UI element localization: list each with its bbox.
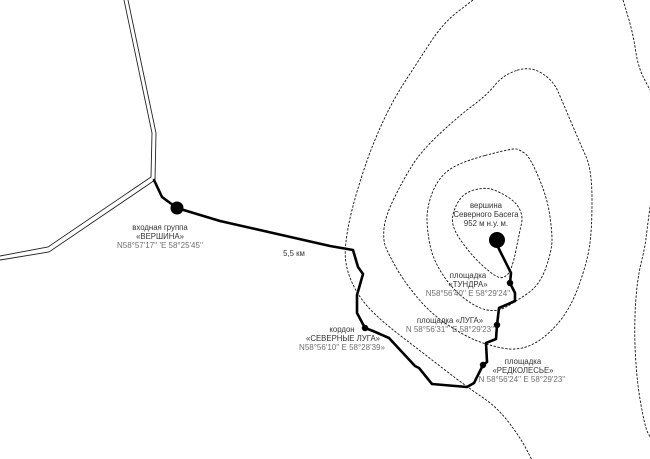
label: entrance: N58°57'17'' 'E 58°25'45'' (117, 241, 203, 250)
label: Redkolesye site (479, 357, 566, 384)
marker: summit (489, 232, 505, 248)
road: double line (0, 0, 156, 260)
label: entrance: входная группа (132, 223, 188, 232)
label: summit: Северного Басега (453, 210, 519, 219)
label: Redkolesye site: площадка (505, 357, 542, 366)
label: Luga site: площадка «ЛУГА» (417, 316, 484, 325)
label: Severnye Lugi cordon: N58°56'10'' E 58°28'39» (299, 343, 386, 352)
label: Luga site (406, 316, 495, 334)
marker: entrance (170, 202, 184, 214)
trail route (154, 180, 515, 387)
marker: Redkolesye (480, 362, 486, 368)
marker: Severnye Lugi (362, 325, 368, 331)
label: distance: 5,5 км (283, 249, 305, 258)
label: summit: вершина (470, 201, 503, 210)
label: Luga site: N 58°56'31'' 'E 58°29'23'' (406, 325, 495, 334)
label: Redkolesye site: «РЕДКОЛЕСЬЕ» (492, 366, 554, 375)
label: entrance: «ВЕРШИНА» (136, 232, 185, 241)
label: Tundra site: N58°56'40'' E 58°29'24'' (426, 289, 511, 298)
label: Tundra site (426, 271, 511, 298)
label: Tundra site: «ТУНДРА» (448, 280, 488, 289)
marker: Tundra (507, 280, 513, 286)
label: Severnye Lugi cordon: «СЕВЕРНЫЕ ЛУГА» (306, 334, 381, 343)
label: Redkolesye site: N 58°56'24'' E 58°29'23'' (479, 375, 566, 384)
label: entrance (117, 223, 203, 250)
elevation contours (345, 0, 650, 459)
label: summit: 952 м н.у. м. (464, 219, 508, 228)
marker: Luga (494, 322, 500, 328)
label: Severnye Lugi cordon (299, 325, 386, 352)
label: Tundra site: площадка (450, 271, 487, 280)
label: Severnye Lugi cordon: кордон (329, 325, 355, 334)
label: summit (453, 201, 519, 228)
